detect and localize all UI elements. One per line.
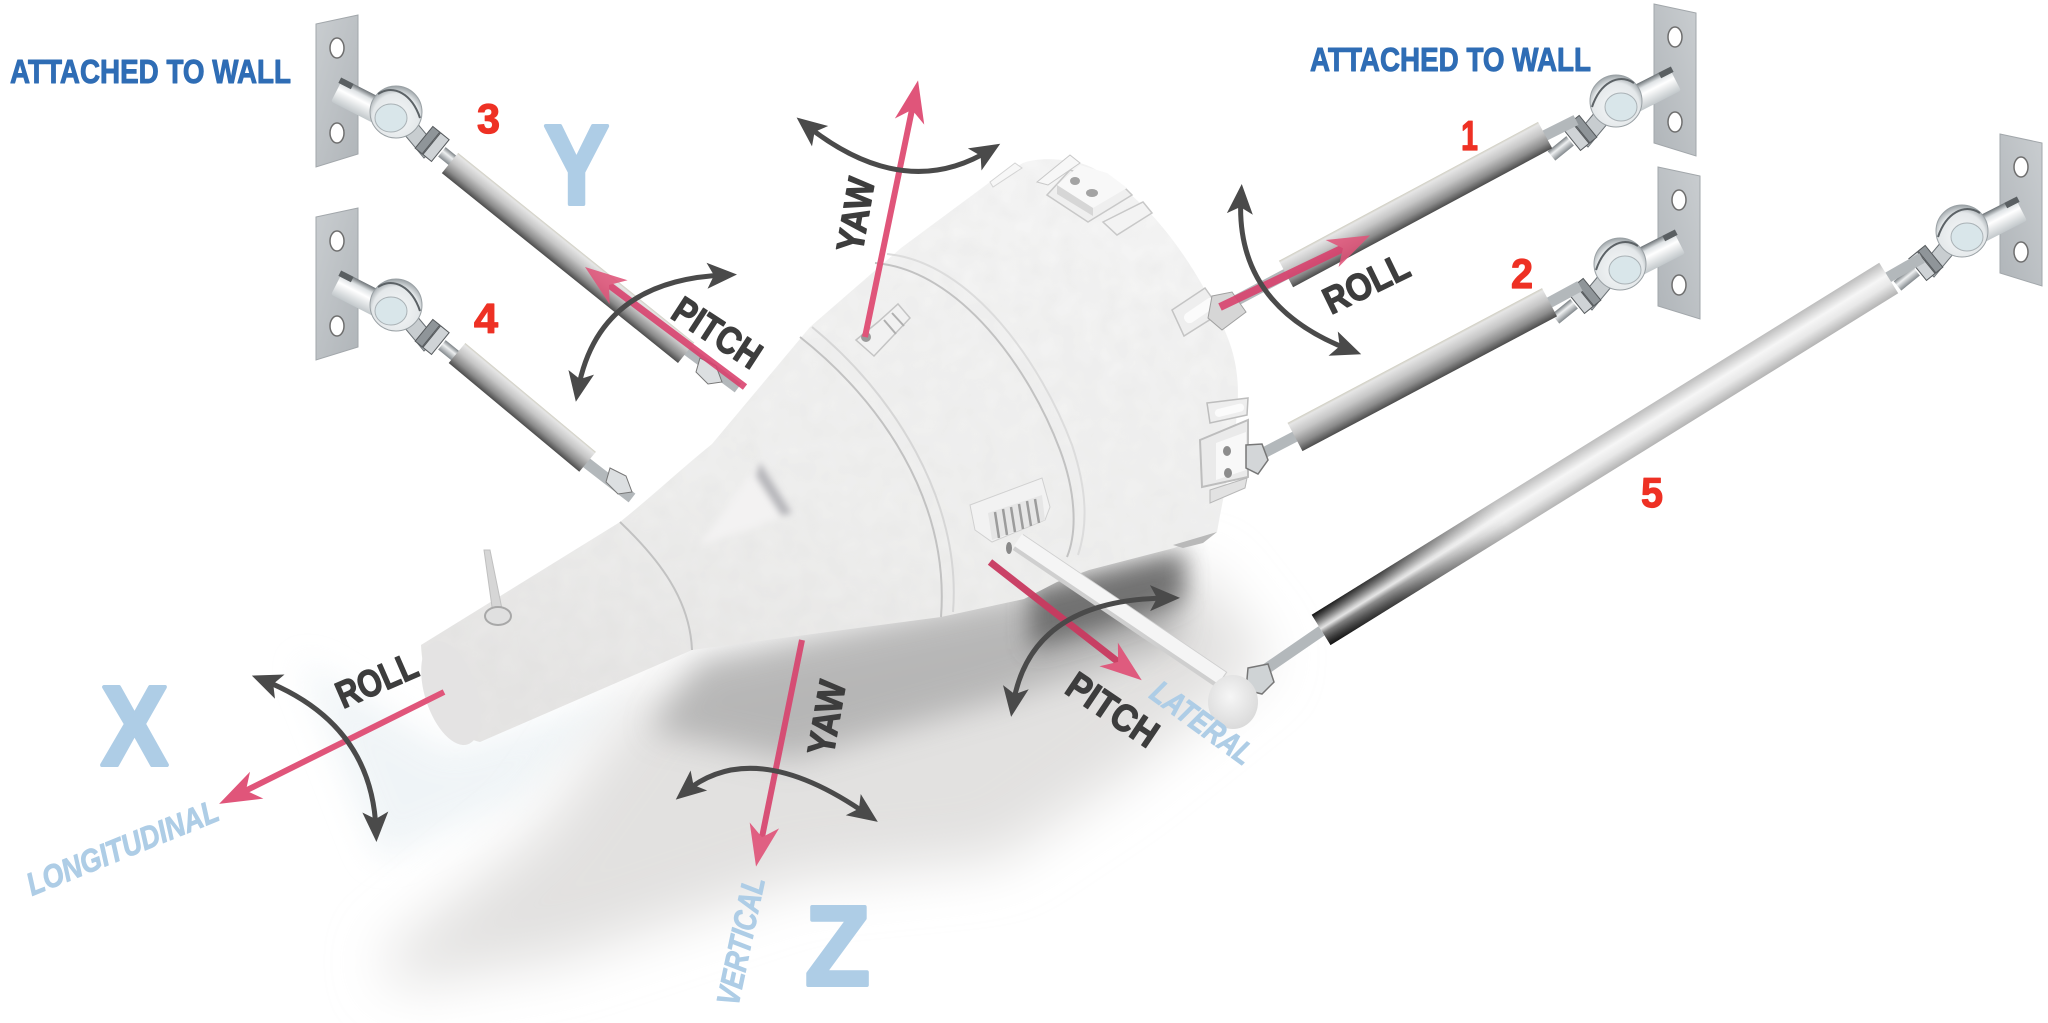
- rim tab c: [990, 163, 1022, 187]
- strut 5 with wall mount and end ball: [1208, 134, 2042, 729]
- axis letter Y: Y: [544, 102, 609, 228]
- motion label: pitch top: PITCH: [664, 289, 769, 378]
- small bracket under yaw arrow: [856, 304, 910, 356]
- nose pin: [484, 550, 511, 625]
- red axis arrow: yaw up: [865, 100, 914, 337]
- curved arrow: yaw bottom: [685, 768, 868, 815]
- fairing notch: [700, 462, 792, 545]
- red axis arrow: roll right: [1220, 244, 1352, 307]
- section seams: [620, 254, 1085, 650]
- strut 1 with wall mount: [1208, 4, 1696, 330]
- curved arrow: roll right: [1241, 196, 1350, 350]
- strut 2 with wall mount: [1200, 167, 1700, 503]
- strut 3 with wall mount: [316, 15, 738, 388]
- rim tab b: [1103, 202, 1152, 235]
- side tabs on rim: [1172, 288, 1248, 423]
- axis name vertical: VERTICAL: [710, 874, 772, 1008]
- red axis arrow: longitudinal: [237, 692, 444, 795]
- axis name longitudinal: LONGITUDINAL: [21, 793, 224, 902]
- curved arrow: pitch top: [578, 275, 725, 390]
- axis name lateral: LATERAL: [1144, 674, 1261, 772]
- strut 2 clevis bracket: [1200, 420, 1268, 503]
- strut 4 with wall mount: [316, 208, 632, 498]
- red axis arrow: lateral: [990, 562, 1126, 668]
- side grille box: [970, 478, 1217, 554]
- top bracket: [990, 155, 1152, 235]
- red axis arrow: vertical: [760, 640, 802, 847]
- strut number 2: 2: [1511, 250, 1533, 297]
- curved arrow: pitch bottom: [1013, 598, 1168, 705]
- rim tab a: [1037, 155, 1080, 185]
- cone body: [410, 159, 1238, 752]
- curved arrow: yaw top: [806, 125, 990, 171]
- strut number 4: 4: [474, 295, 499, 342]
- motion label: yaw top: YAW: [830, 174, 884, 256]
- motion label: roll left: ROLL: [330, 645, 425, 717]
- curved arrow: roll left: [263, 680, 376, 830]
- lateral rod from cone to ball: [1018, 540, 1222, 680]
- motion label: yaw bottom: YAW: [801, 677, 855, 759]
- axis letter X: X: [101, 663, 168, 789]
- nose face: [410, 634, 492, 752]
- strut number 5: 5: [1641, 469, 1663, 516]
- motion label: pitch bottom: PITCH: [1058, 665, 1166, 756]
- wall label right: ATTACHED TO WALL: [1310, 41, 1591, 78]
- axis letter Z: Z: [805, 883, 870, 1009]
- red axis arrow: pitch left: [601, 279, 745, 387]
- strut number 1: 1: [1461, 112, 1478, 159]
- ground shadow of the cone: [300, 550, 1270, 985]
- motion label: roll right: ROLL: [1317, 245, 1417, 323]
- strut number 3: 3: [477, 95, 500, 142]
- wall label left: ATTACHED TO WALL: [10, 53, 291, 90]
